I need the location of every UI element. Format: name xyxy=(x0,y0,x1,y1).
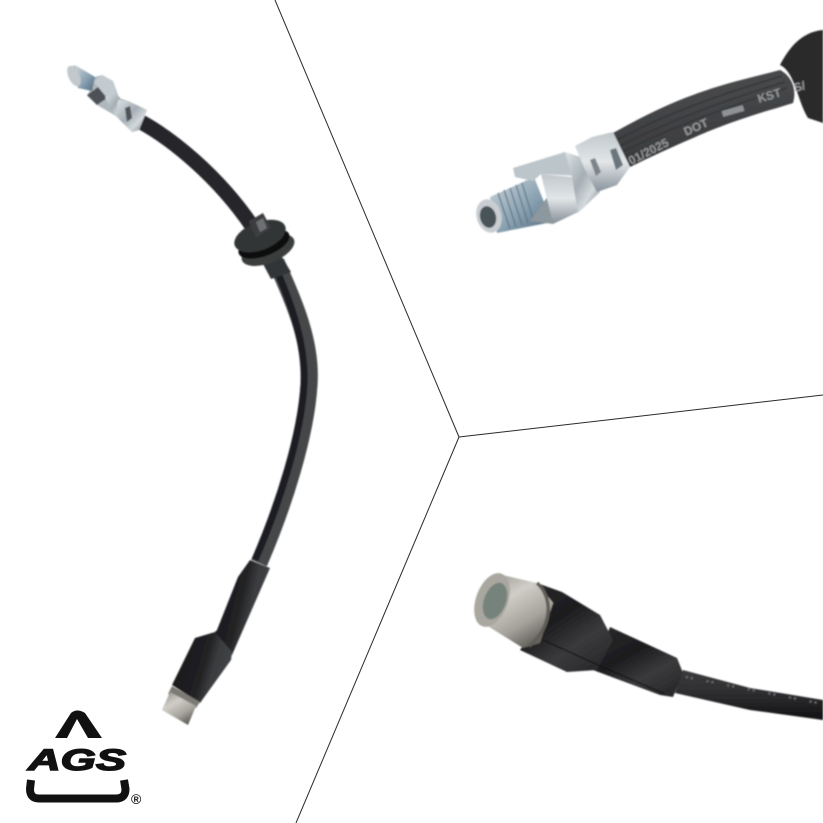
gap xyxy=(234,223,294,265)
close-up: male fitting xyxy=(473,30,823,236)
tip xyxy=(64,64,84,88)
lower metal fitting xyxy=(162,686,200,725)
thread ribs xyxy=(498,183,534,229)
wordmark: AGS xyxy=(26,744,126,777)
fitting bore xyxy=(477,204,499,230)
hose print: KST xyxy=(756,85,783,106)
lower stem xyxy=(262,254,291,279)
base bracket xyxy=(30,780,126,798)
crimped collar xyxy=(575,132,630,192)
hose print: DOT xyxy=(682,115,711,139)
hose print: 01/2025 xyxy=(626,135,671,168)
sleeve seams xyxy=(543,640,665,694)
hose xyxy=(675,670,823,720)
registered mark: ® xyxy=(131,791,142,807)
lower sleeve narrow xyxy=(205,560,270,655)
top collar xyxy=(249,213,271,238)
hex nut xyxy=(94,75,117,99)
AGS logo xyxy=(26,710,142,807)
large grommet xyxy=(780,30,823,123)
hex body xyxy=(513,152,600,224)
wide sleeve xyxy=(520,583,613,672)
metal ring xyxy=(529,583,548,646)
body xyxy=(105,94,124,120)
ribbed hose xyxy=(613,70,794,167)
upper metal fitting xyxy=(64,64,147,132)
threaded bore xyxy=(478,579,512,623)
hose print xyxy=(686,677,823,704)
lower sleeve wide xyxy=(172,632,232,703)
hose print xyxy=(626,78,807,168)
thread xyxy=(490,177,552,233)
collar xyxy=(116,100,147,132)
fitting face xyxy=(467,568,517,632)
narrow sleeve xyxy=(593,627,683,697)
metal body xyxy=(478,575,553,648)
upper disc xyxy=(230,213,290,259)
full brake hose xyxy=(64,64,309,725)
hose lower section xyxy=(259,262,309,563)
thread xyxy=(75,65,95,91)
close-up: female fitting xyxy=(467,568,823,720)
chevron xyxy=(55,710,102,738)
hose print: S/ xyxy=(792,78,807,95)
divider lines xyxy=(275,0,823,823)
grommet xyxy=(230,213,299,279)
hose ribs xyxy=(617,76,787,152)
hose dark inner stripe xyxy=(255,264,304,560)
hose upper section xyxy=(141,122,252,226)
fitting silhouette xyxy=(73,65,147,132)
lower disc xyxy=(237,227,299,273)
fitting end xyxy=(473,196,505,236)
